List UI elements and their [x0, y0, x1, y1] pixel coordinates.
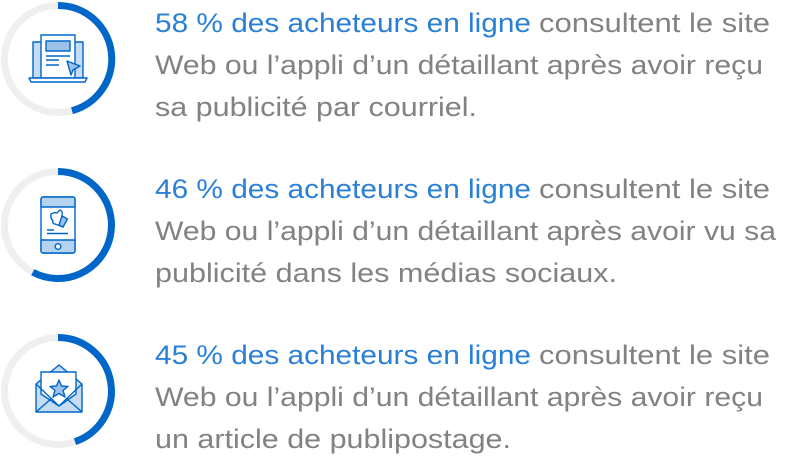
icon: phone with thumbs up	[41, 197, 75, 253]
text: courriel: 58 % des acheteurs en ligne	[155, 8, 531, 38]
text: courriel: Web ou l’appli d’un détaillant après avoir reçu	[155, 50, 763, 80]
text: médias sociaux: publicité dans les médias sociaux.	[155, 258, 617, 288]
progress ring: publipostage	[4, 338, 112, 444]
text: médias sociaux: 46 % des acheteurs en ligne	[155, 174, 531, 204]
text: publipostage: consultent le site	[539, 340, 770, 370]
panel: publipostage	[4, 338, 770, 454]
icon: laptop with web page	[29, 35, 87, 82]
text: publipostage	[155, 340, 770, 454]
icon: envelope with star	[36, 365, 82, 412]
text: publipostage: Web ou l’appli d’un détaillant après avoir reçu	[155, 382, 763, 412]
text: courriel: sa publicité par courriel.	[155, 92, 477, 122]
text: médias sociaux: Web ou l’appli d’un détaillant après avoir vu sa	[155, 216, 777, 246]
panel: médias sociaux	[4, 172, 777, 288]
progress ring: médias sociaux	[4, 172, 112, 278]
panel: courriel	[4, 5, 770, 122]
text: médias sociaux	[155, 174, 777, 288]
progress ring: courriel	[4, 5, 112, 112]
text: publipostage: 45 % des acheteurs en ligne	[155, 340, 531, 370]
text: courriel: consultent le site	[539, 8, 770, 38]
text: courriel	[155, 8, 770, 122]
text: publipostage: un article de publipostage.	[155, 424, 511, 454]
text: médias sociaux: consultent le site	[539, 174, 770, 204]
